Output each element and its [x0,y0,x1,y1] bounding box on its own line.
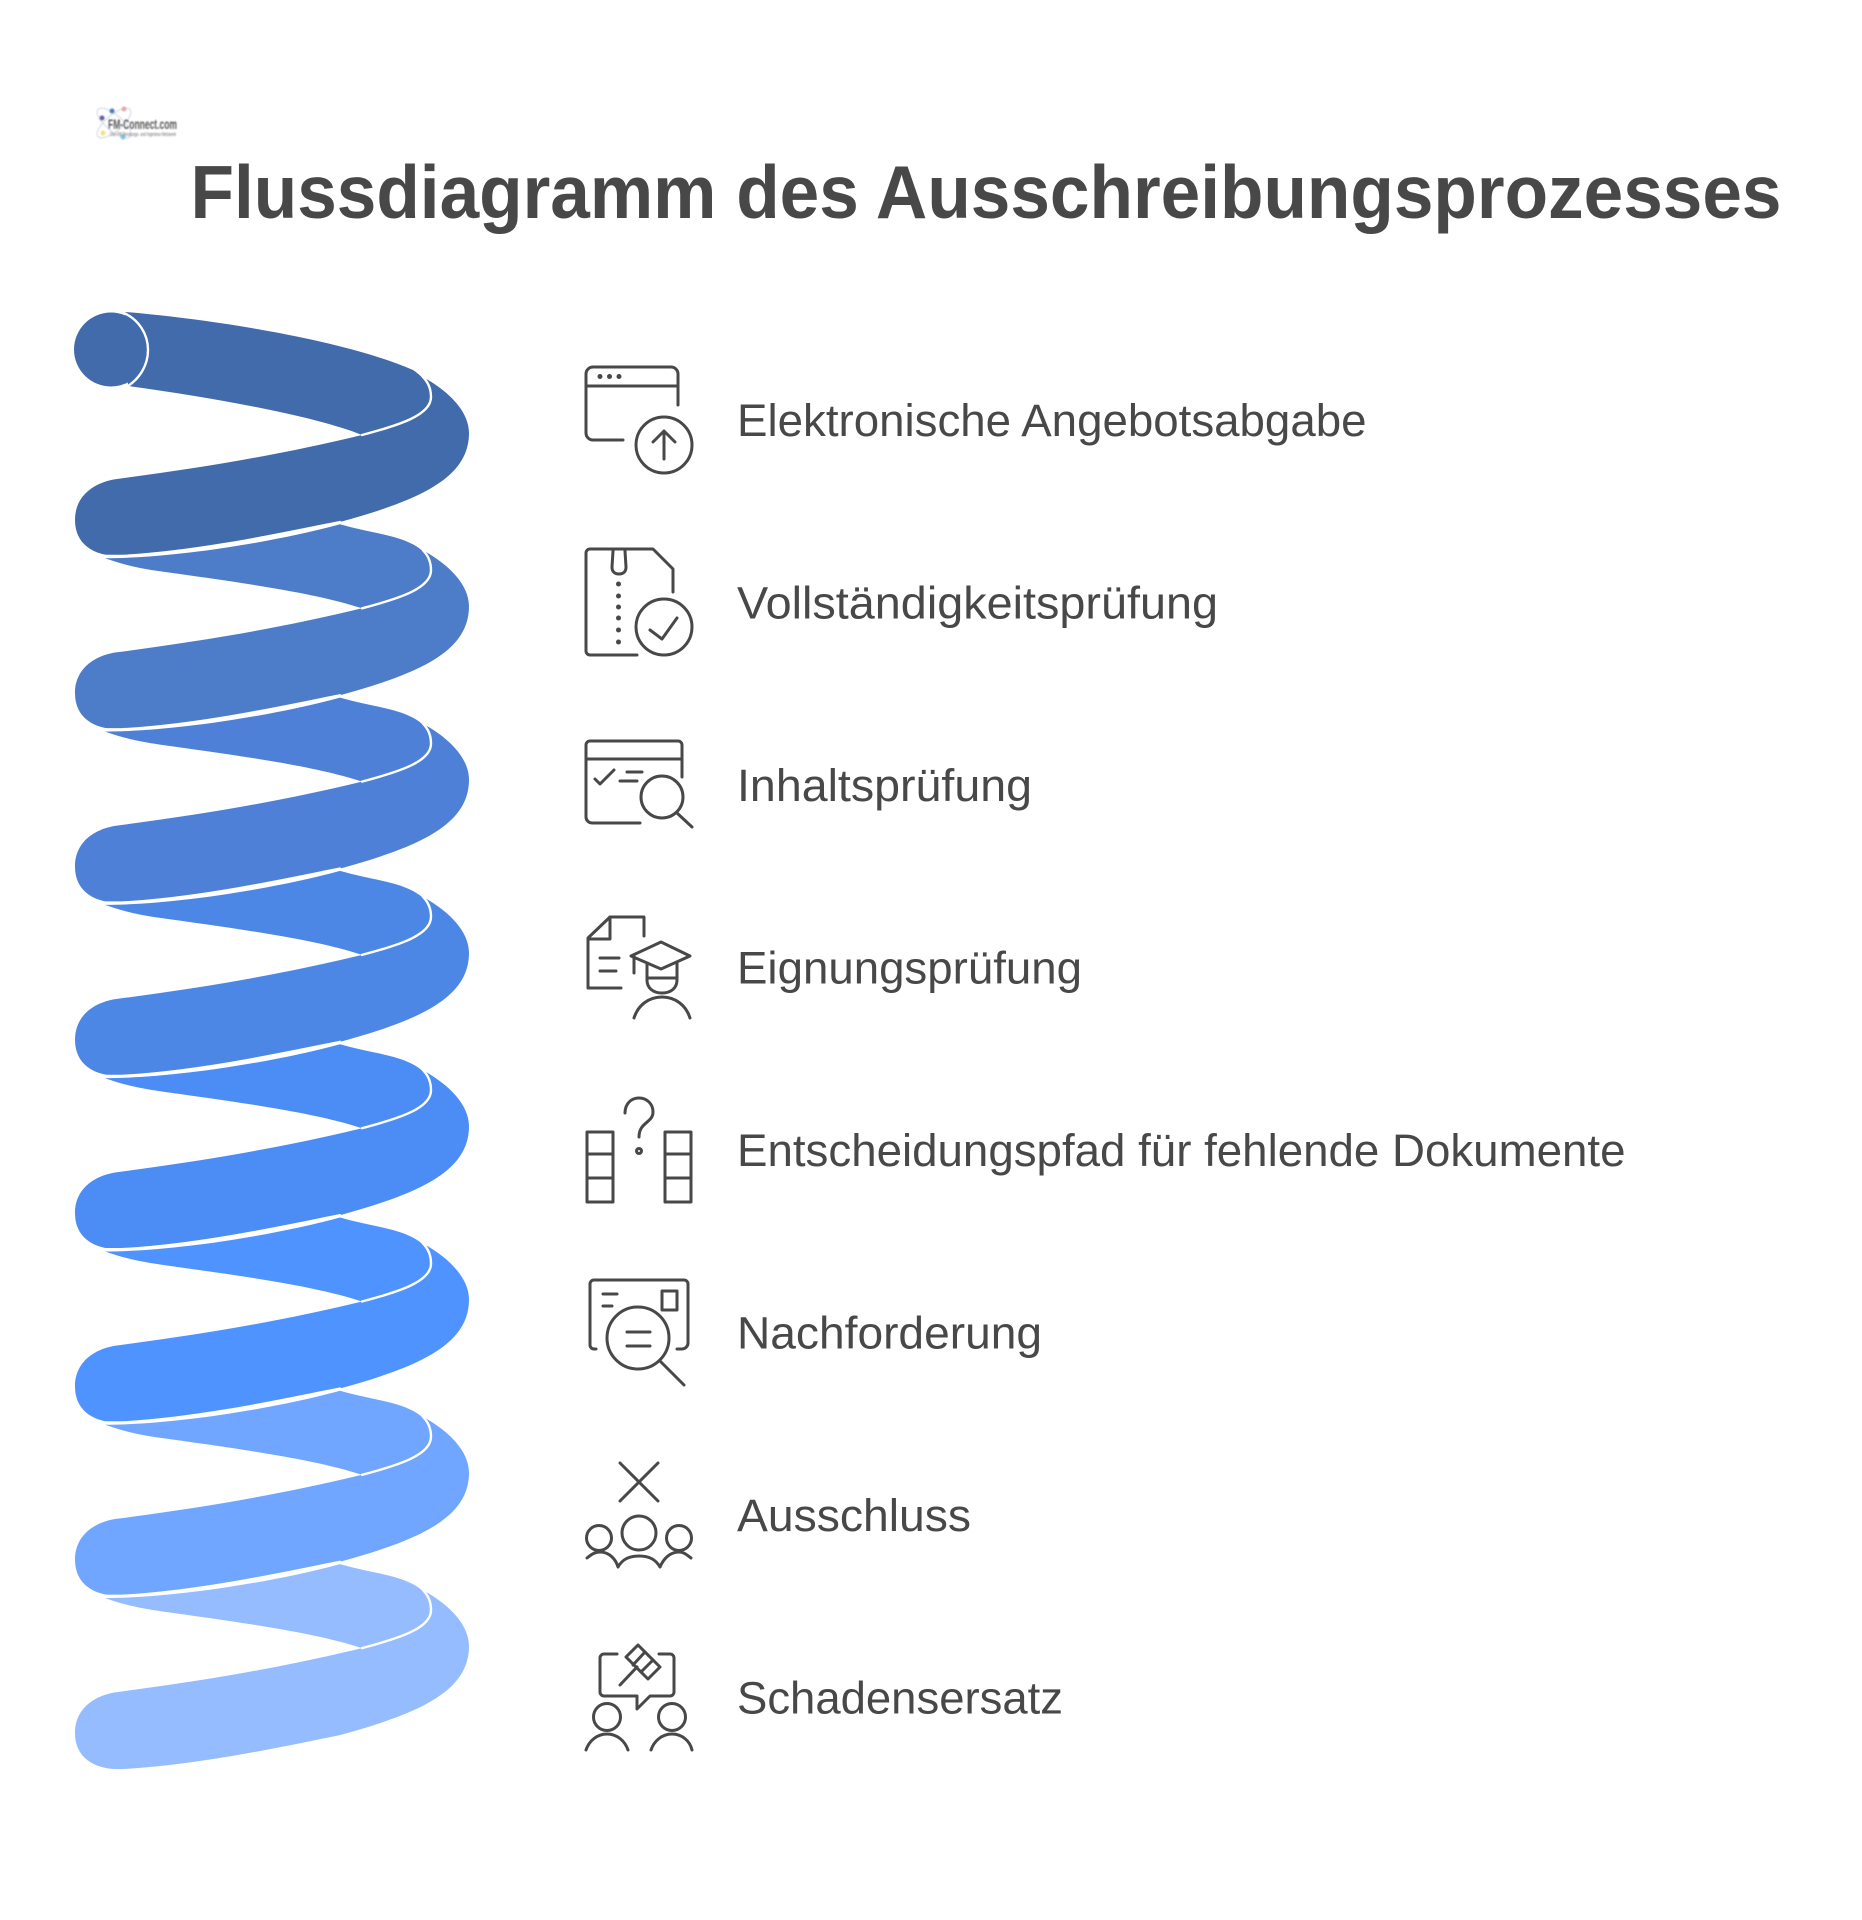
coil 7 [75,1391,469,1596]
label: Schadensersatz [737,1672,1063,1724]
step 2: Vollständigkeitsprüfung [586,549,1218,655]
label: Entscheidungspfad für fehlende Dokumente [737,1125,1626,1176]
icon: checklist window with magnifier [586,741,692,827]
coil 8 [75,1564,469,1769]
coil 1 [74,312,469,556]
label: Nachforderung [737,1308,1042,1358]
step 8: Schadensersatz [586,1645,1063,1750]
icon: cross over group of people [586,1463,692,1567]
logo: FM-Connect: FM-Connect.com [108,116,177,132]
logo: FM-Connect: Das FM-Beratungs- und Ingenieur-Netzwerk [110,132,176,138]
coil 2 [75,524,469,729]
icon: card with magnifier [590,1280,688,1385]
step 5: Entscheidungspfad für fehlende Dokumente [587,1098,1626,1202]
icon: zip document with check [586,549,692,655]
step 6: Nachforderung [590,1280,1042,1385]
label: Eignungsprüfung [737,942,1082,994]
icon: two stacks with question mark [587,1098,691,1202]
coil 4 [75,871,469,1076]
step 1: Elektronische Angebotsabgabe [586,367,1366,473]
label: Ausschluss [737,1490,971,1541]
label: Vollständigkeitsprüfung [737,578,1218,628]
icon: gavel in speech bubble with two people [586,1645,692,1750]
icon: browser window with upload [586,367,692,473]
logo: FM-Connect [93,103,177,143]
step 7: Ausschluss [586,1463,971,1567]
icon: document and graduate [588,917,690,1018]
label: Elektronische Angebotsabgabe [737,395,1366,446]
step 3: Inhaltsprüfung [586,741,1032,827]
spiral with eight coils [74,312,469,1769]
coil 3 [75,698,469,903]
title: Flussdiagramm des Ausschreibungsprozesses [190,150,1782,234]
label: Inhaltsprüfung [737,760,1032,811]
coil 5 [75,1044,469,1249]
step 4: Eignungsprüfung [588,917,1082,1018]
coil 6 [75,1218,469,1423]
